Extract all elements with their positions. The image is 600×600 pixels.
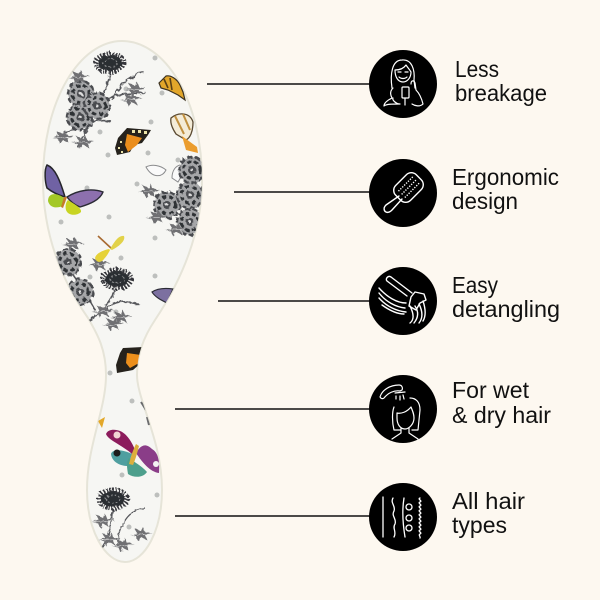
icon: hair types: [369, 483, 437, 551]
label: wet and dry hair: [452, 377, 551, 428]
leader line: wet and dry hair: [175, 408, 372, 410]
label: all hair types: [452, 488, 525, 538]
icon: paddle brush: [369, 159, 437, 227]
label: less breakage: [455, 56, 547, 106]
label: wet and dry hair: For wet: [452, 377, 530, 403]
icon: shower and hair: [369, 375, 437, 443]
label: all hair types: types: [452, 512, 507, 538]
label: all hair types: All hair: [452, 488, 525, 514]
butterfly: bottom purple: [152, 288, 173, 303]
butterfly: neck moth: [116, 347, 143, 373]
label: easy detangling: [452, 272, 560, 322]
butterfly: orange top right: [159, 76, 185, 100]
label: less breakage: Less: [455, 56, 499, 82]
butterfly: striped right: [171, 114, 198, 153]
label: easy detangling: detangling: [452, 296, 560, 322]
floral print: [45, 54, 205, 552]
icon: less breakage: [369, 50, 437, 118]
handle floral cluster: [92, 490, 152, 552]
butterfly: peacock: [106, 430, 159, 477]
butterfly: orange moth: [115, 128, 151, 155]
icon: detangling: [369, 267, 437, 335]
label: ergonomic design: Ergonomic: [452, 164, 559, 190]
dragonfly: [95, 236, 124, 262]
lower floral cluster: [55, 237, 140, 331]
polka dots: [58, 56, 180, 530]
insect: grey marks: [141, 402, 149, 425]
leader line: less breakage: [207, 83, 372, 85]
label: easy detangling: Easy: [452, 272, 498, 298]
brush body: [43, 41, 202, 562]
butterfly: purple and green: [45, 165, 103, 215]
hairbrush illustration: [43, 41, 205, 562]
insect: small bee: [98, 417, 105, 428]
leader line: ergonomic design: [234, 191, 372, 193]
label: less breakage: breakage: [455, 80, 547, 106]
label: ergonomic design: design: [452, 188, 518, 214]
label: wet and dry hair: & dry hair: [452, 402, 551, 428]
leader line: all hair types: [175, 515, 372, 517]
top floral cluster: [52, 54, 146, 149]
leader line: easy detangling: [218, 300, 372, 302]
label: ergonomic design: [452, 164, 559, 214]
right floral cluster: [138, 157, 205, 236]
